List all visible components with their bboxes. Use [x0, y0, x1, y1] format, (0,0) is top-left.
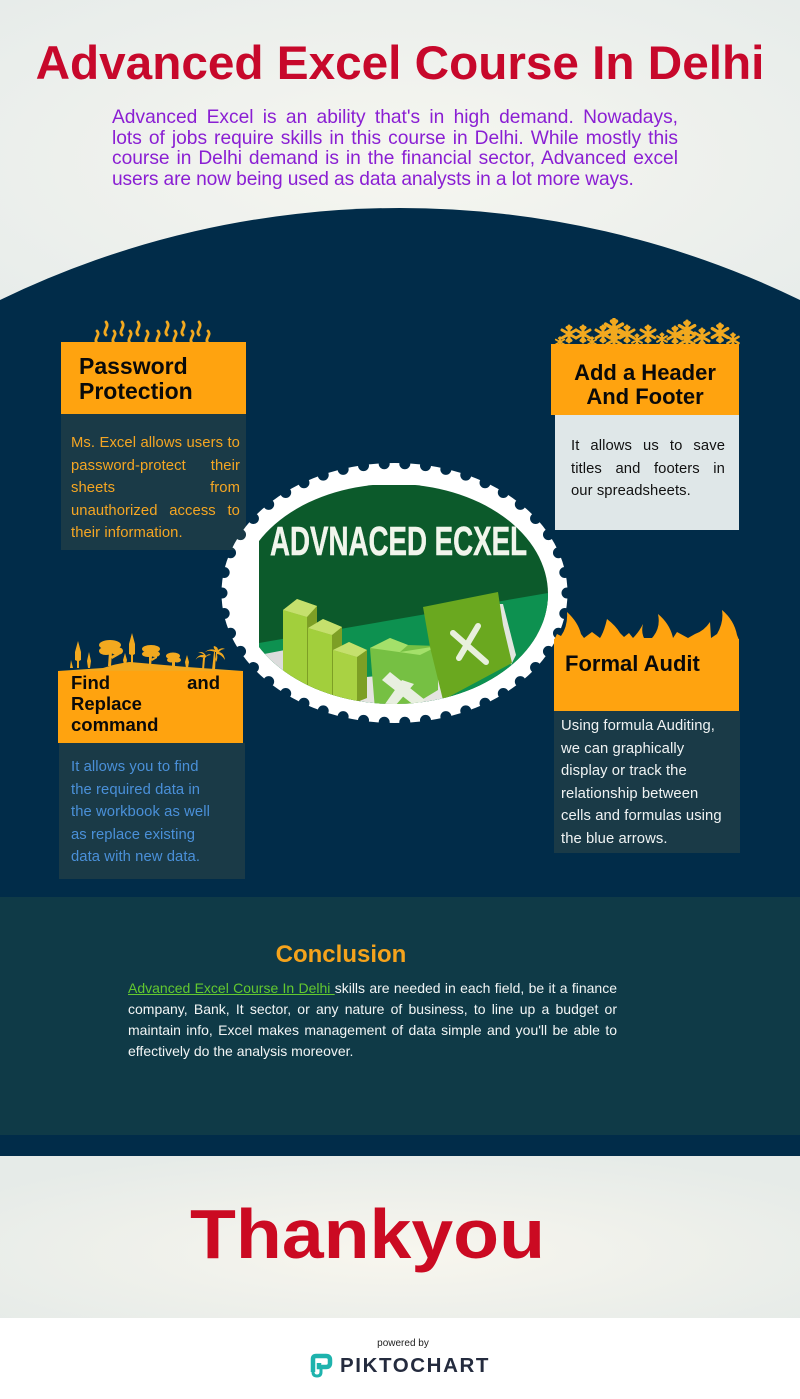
heading: Formal Audit	[565, 651, 700, 676]
heading: Protection	[79, 378, 193, 404]
conclusion text	[128, 980, 617, 1059]
text block: unauthorized access to	[71, 502, 240, 518]
text block: as replace existing	[71, 826, 195, 842]
title: Advanced Excel Course In Delhi	[36, 37, 764, 90]
intro paragraph: Advanced Excel is an ability that's in high demand. Nowadays,	[112, 107, 678, 128]
text block	[554, 711, 740, 853]
panel: formal audit	[554, 610, 740, 853]
intro paragraph: lots of jobs require skills in this course in Delhi. While mostly this	[112, 128, 678, 149]
conclusion heading: Conclusion	[276, 941, 406, 968]
intro paragraph: course in Delhi demand is in the financial sector, Advanced excel	[112, 148, 678, 169]
heading	[554, 639, 739, 711]
conclusion text: company, Bank, It sector, or any nature of business, to line up a budget or	[128, 1001, 617, 1017]
top light background with dark dome	[0, 0, 800, 300]
heading: Add a Header	[574, 360, 716, 385]
stamp edge	[222, 463, 568, 723]
text block: relationship between	[561, 786, 698, 802]
bar 1	[283, 599, 317, 687]
logo icon	[310, 1354, 332, 1378]
text block	[555, 415, 739, 530]
icon: steam	[94, 320, 211, 342]
icon: flames	[554, 610, 739, 639]
text block: the blue arrows.	[561, 830, 668, 846]
heading: Find and	[71, 672, 220, 693]
heading	[61, 342, 246, 414]
heading: And Footer	[586, 384, 704, 409]
text block: display or track the	[561, 763, 687, 779]
heading: Password	[79, 353, 188, 379]
heading	[551, 344, 739, 415]
logo word: PIKTOCHART	[340, 1354, 490, 1377]
center stamp image	[222, 463, 568, 723]
heading	[58, 671, 243, 743]
panel: add a header and footer	[551, 318, 740, 530]
text block: their information.	[71, 525, 183, 541]
powered by: powered by	[377, 1338, 429, 1349]
conclusion text: Advanced Excel Course In Delhi skills are needed in each field, be it a finance	[128, 980, 617, 996]
text block	[59, 743, 245, 879]
text block: It allows you to find	[71, 759, 199, 775]
bar 3	[333, 642, 367, 702]
text block: Using formula Auditing,	[561, 718, 715, 734]
panel: conclusion	[0, 897, 800, 1135]
conclusion text: maintain info, Excel makes management of data simple and you'll be able to	[128, 1022, 617, 1038]
cubes	[370, 638, 438, 710]
thankyou word: Thankyou	[190, 1195, 545, 1273]
icon: trees	[58, 633, 242, 671]
intro paragraph: users are now being used as data analysts in a lot more ways.	[112, 169, 634, 190]
text block: sheets from	[71, 480, 240, 496]
text block: titles and footers in	[571, 460, 725, 476]
heading: command	[71, 714, 158, 735]
intro paragraph	[112, 107, 678, 190]
excel picture	[259, 485, 548, 704]
footer	[0, 1318, 800, 1399]
icon: snowflakes	[554, 318, 740, 344]
text block: the workbook as well	[71, 804, 210, 820]
panel: find and replace	[58, 633, 245, 879]
text block: our spreadsheets.	[571, 483, 691, 499]
heading: Replace	[71, 693, 142, 714]
text block: Ms. Excel allows users to	[71, 435, 240, 451]
text block: we can graphically	[561, 740, 684, 756]
conclusion text: effectively do the analysis moreover.	[128, 1043, 353, 1059]
text block	[61, 414, 246, 550]
text block: cells and formulas using	[561, 808, 722, 824]
bar 2	[308, 619, 342, 698]
thank you band	[0, 1156, 800, 1318]
folder	[498, 604, 516, 665]
text block: the required data in	[71, 782, 200, 798]
text block: It allows us to save	[571, 438, 725, 454]
text block: data with new data.	[71, 849, 200, 865]
panel: password protection	[61, 320, 246, 550]
text block: password-protect their	[71, 458, 240, 474]
